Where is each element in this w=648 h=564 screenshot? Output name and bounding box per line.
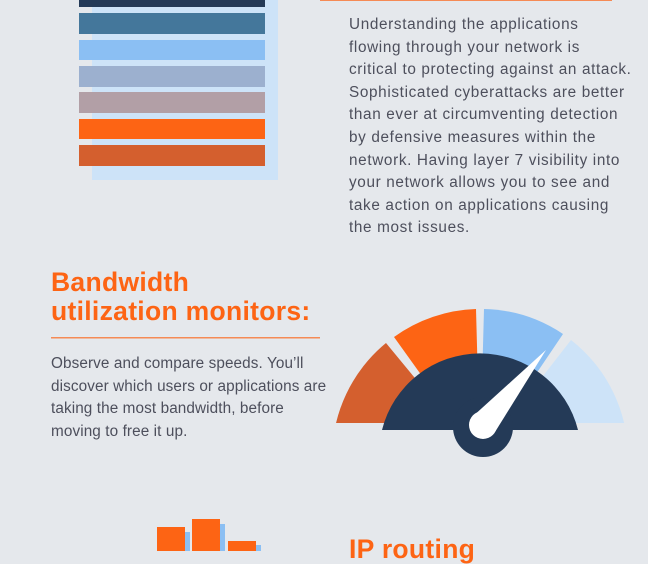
text: bandwidth description: Observe and compare speeds. You’ll [51,355,304,372]
text: layer 7 visibility: the most issues. [349,219,470,236]
heading: IP routing: IP routing [349,534,475,564]
heading: bandwidth [51,267,310,326]
text: layer 7 visibility: by defensive measures within the [349,129,596,146]
text: bandwidth description: taking the most bandwidth, before [51,400,284,417]
text: bandwidth description: discover which users or applications are [51,378,326,395]
text: layer 7 visibility: Understanding the applications [349,16,579,33]
heading: bandwidth: Bandwidth [51,267,189,297]
text: layer 7 visibility: your network allows you to see and [349,174,610,191]
text: layer 7 visibility: flowing through your network is [349,39,580,56]
text: bandwidth description [51,355,326,440]
text: layer 7 visibility: take action on applications causing [349,197,609,214]
text: layer 7 visibility: Sophisticated cyberattacks are better [349,84,625,101]
text: layer 7 visibility: than ever at circumventing detection [349,106,618,123]
heading: bandwidth: utilization monitors: [51,296,310,326]
text: bandwidth description: moving to free it up. [51,423,187,440]
icon: bar chart bottom [157,519,261,551]
icon: speed gauge [336,309,624,457]
text: layer 7 visibility [349,16,632,236]
text: layer 7 visibility: network. Having layer 7 visibility into [349,152,620,169]
text: layer 7 visibility: critical to protecting against an attack. [349,61,632,78]
